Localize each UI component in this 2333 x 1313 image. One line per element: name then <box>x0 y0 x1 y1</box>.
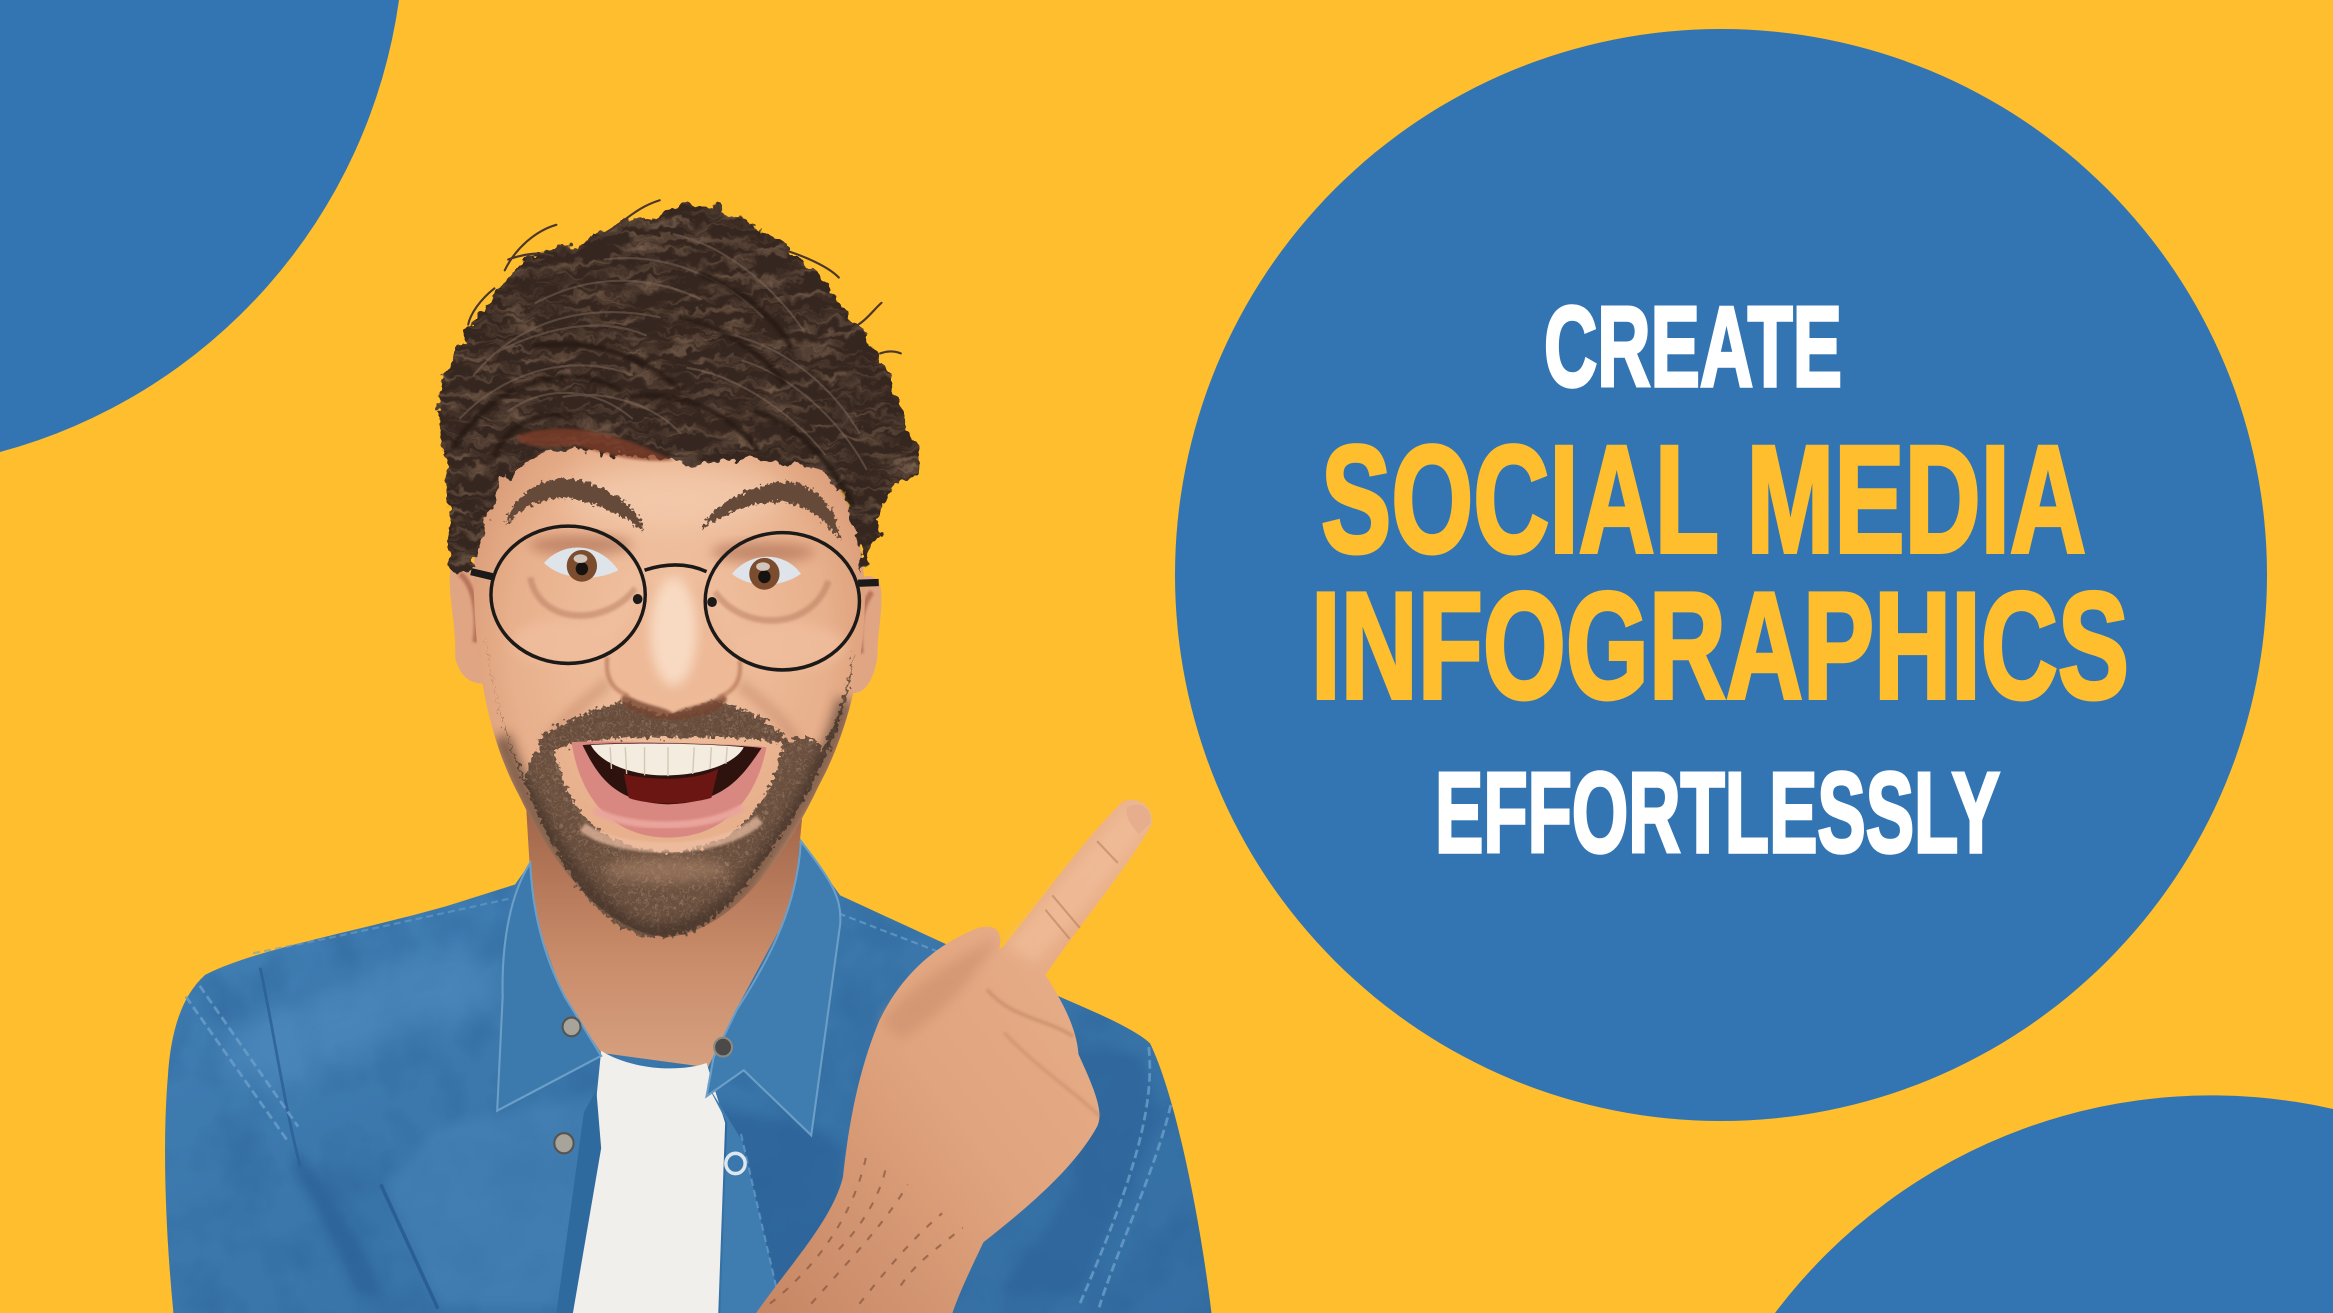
collar right <box>707 841 840 1135</box>
neck <box>525 794 804 1067</box>
eyebrows <box>505 479 840 540</box>
denim shirt <box>165 841 1211 1313</box>
illustration: excited man pointing <box>165 200 1211 1313</box>
pointing hand <box>756 800 1152 1313</box>
shirt buttons <box>554 1017 745 1174</box>
beard <box>486 635 854 937</box>
collar left <box>497 863 601 1111</box>
decorative circle: bottom right <box>1775 1095 2333 1313</box>
hair strands <box>453 200 901 505</box>
heading line: EFFORTLESSLY: EFFORTLESSLY <box>1435 750 2000 877</box>
shirt front edges <box>556 1083 782 1313</box>
nose <box>607 577 740 721</box>
mouth <box>572 742 766 848</box>
face <box>474 426 865 937</box>
headline <box>1311 284 2129 877</box>
panel: big blue circle <box>1175 29 2267 1121</box>
eyes <box>544 548 801 590</box>
heading line: CREATE: CREATE <box>1544 284 1842 411</box>
glasses <box>471 526 879 670</box>
ears <box>450 561 881 693</box>
facial shading <box>512 465 846 744</box>
decorative circle: top left <box>0 0 399 452</box>
hair <box>439 200 918 574</box>
t-shirt <box>570 1051 725 1313</box>
